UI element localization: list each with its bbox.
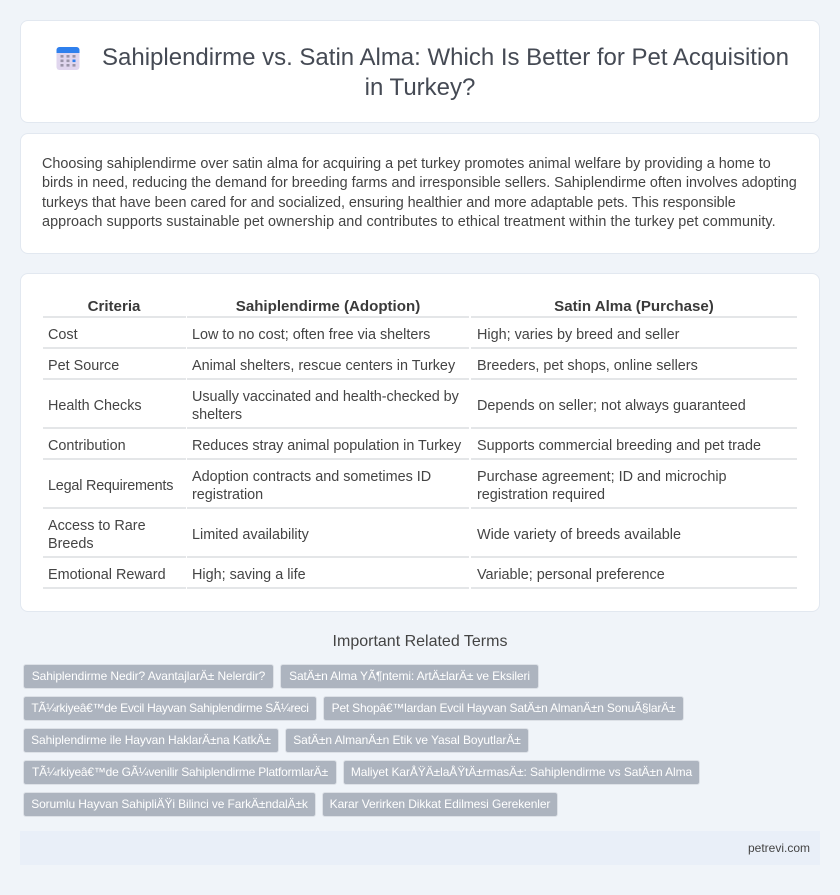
icon: calendar [56,47,80,70]
row: emotional reward: Emotional Reward [48,567,166,583]
row: access to rare breeds [48,518,681,552]
table header: Satin Alma (Purchase) [554,298,714,315]
text block: introduction [42,156,797,230]
text block: introduction: birds in need, reducing the demand for breeding farms and irresponsible sellers. Sahiplendirme often involves adopting [42,175,797,191]
title [102,44,789,101]
row: cost: Low to no cost; often free via shelters [192,327,430,343]
row: health checks [48,389,746,423]
row: legal requirements: Legal Requirements [48,478,173,494]
row: cost: Cost [48,327,78,343]
row: health checks: shelters [192,407,242,423]
tags: related terms: SatÄ±n Alma YÃ¶ntemi: ArtÄ±larÄ± ve Eksileri [289,669,530,683]
row: legal requirements: registration required [477,487,605,503]
row: access to rare breeds: Breeds [48,536,94,552]
row: contribution [48,438,761,454]
row: legal requirements: Purchase agreement; ID and microchip [477,469,727,485]
row: emotional reward [48,567,665,583]
tags: related terms: SatÄ±n AlmanÄ±n Etik ve Yasal BoyutlarÄ± [293,733,521,747]
panel: comparison table [20,273,820,612]
tags: related terms: Sahiplendirme Nedir? AvantajlarÄ± Nelerdir? [32,669,265,683]
tags: related terms: Sahiplendirme ile Hayvan HaklarÄ±na KatkÄ± [31,733,271,747]
row: legal requirements: registration [192,487,263,503]
row: legal requirements: Adoption contracts and sometimes ID [192,469,431,485]
text block: introduction: Choosing sahiplendirme over satin alma for acquiring a pet turkey promotes animal welfare by providing a home to [42,156,771,172]
tags: related terms: TÃ¼rkiyeâ€™de GÃ¼venilir Sahiplendirme PlatformlarÄ± [32,765,328,779]
panel: title card [20,20,820,123]
row: pet source: Breeders, pet shops, online sellers [477,358,698,374]
row: health checks: Depends on seller; not always guaranteed [477,398,746,414]
tags: related terms: Sorumlu Hayvan SahipliÄŸi Bilinci ve FarkÄ±ndalÄ±k [31,797,308,811]
tags: related terms: Maliyet KarÅŸÄ±laÅŸtÄ±rmasÄ±: Sahiplendirme vs SatÄ±n Alma [351,765,692,779]
tags: related terms: TÃ¼rkiyeâ€™de Evcil Hayvan Sahiplendirme SÃ¼reci [31,701,309,715]
footer: site name: petrevi.com [748,841,810,855]
table header: Sahiplendirme (Adoption) [236,298,420,315]
row: cost: High; varies by breed and seller [477,327,679,343]
row: contribution: Contribution [48,438,126,454]
tags: related terms [23,664,700,817]
row: contribution: Supports commercial breeding and pet trade [477,438,761,454]
tags: related terms: Pet Shopâ€™lardan Evcil Hayvan SatÄ±n AlmanÄ±n SonuÃ§larÄ± [332,701,675,715]
row: health checks: Health Checks [48,398,142,414]
row: emotional reward: Variable; personal preference [477,567,665,583]
text block: introduction: turkeys that have been cared for and socialized, ensuring healthier and more adaptable pets. This responsible [42,194,736,210]
heading: important related terms: Important Related Terms [333,633,507,650]
row: legal requirements [48,469,727,503]
row: contribution: Reduces stray animal population in Turkey [192,438,461,454]
row: access to rare breeds: Limited availability [192,527,309,543]
row: pet source [48,358,698,374]
row: emotional reward: High; saving a life [192,567,306,583]
row: health checks: Usually vaccinated and health-checked by [192,389,459,405]
row: pet source: Animal shelters, rescue centers in Turkey [192,358,455,374]
tags: related terms: Karar Verirken Dikkat Edilmesi Gerekenler [330,797,550,811]
row: access to rare breeds: Access to Rare [48,518,146,534]
row: cost [48,327,680,343]
table header [88,298,714,315]
row: access to rare breeds: Wide variety of breeds available [477,527,681,543]
title: Sahiplendirme vs. Satin Alma: Which Is Better for Pet Acquisition [102,44,789,71]
row: pet source: Pet Source [48,358,119,374]
text block: introduction: approach supports sustainable pet ownership and contributes to ethical treatment within the turkey pet community. [42,214,776,230]
footer bar [20,831,820,865]
panel: introduction [20,133,820,254]
table header: Criteria [88,298,140,315]
title: in Turkey? [365,74,475,101]
